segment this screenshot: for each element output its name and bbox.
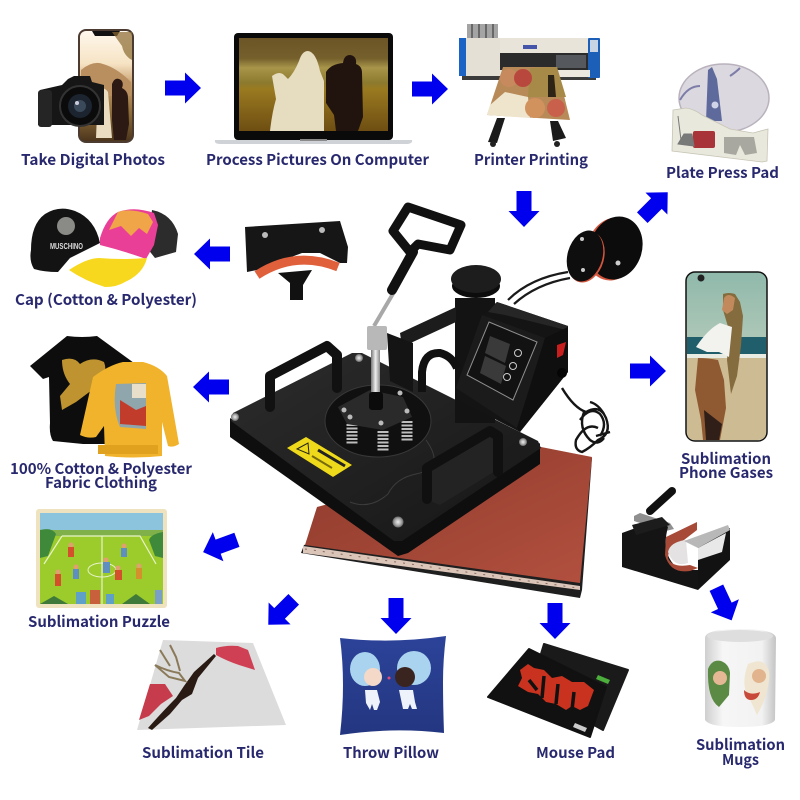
label: printer printing: Printer Printing (474, 149, 588, 170)
warning label (287, 437, 352, 477)
label: cap: Cap (Cotton & Polyester) (15, 289, 197, 310)
machine: heat press (230, 207, 610, 598)
bottom platen (301, 447, 592, 598)
label: throw pillow: Throw Pillow (343, 742, 439, 763)
label: phone cases line 1: Sublimation (681, 448, 771, 469)
heat hose (422, 353, 457, 392)
icon: pink and yellow trucker cap (69, 209, 178, 287)
icon: smartphone with photo (79, 30, 133, 142)
arrow (257, 588, 305, 636)
icon: black t-shirt (30, 336, 134, 444)
icon: pillow (340, 636, 446, 735)
label: plate press pad: Plate Press Pad (666, 162, 779, 183)
product: sublimation mugs (696, 629, 785, 770)
column and knob (400, 265, 501, 423)
arrow (412, 74, 448, 104)
label: sublimation tile: Sublimation Tile (142, 742, 264, 763)
icon: yellow sweatshirt (80, 362, 179, 458)
label: clothing line 2: Fabric Clothing (45, 472, 157, 493)
product: mouse pad (488, 644, 628, 763)
arrow (540, 603, 570, 639)
power cord (562, 388, 610, 452)
icon: printer (459, 24, 600, 147)
product: sublimation tile (137, 640, 286, 763)
label: sublimation mugs line 1: Sublimation (696, 734, 785, 755)
arrow (198, 525, 242, 567)
icon: mouse pads (488, 644, 628, 737)
left handle (270, 346, 337, 407)
bracket (387, 333, 413, 392)
step: process pictures on computer (206, 33, 429, 170)
machine: plate press attachment (508, 210, 651, 304)
product: clothing (10, 336, 192, 493)
arrow (630, 356, 666, 386)
label: sublimation mugs line 2: Mugs (722, 749, 759, 770)
product: plate press pad (666, 64, 779, 183)
icon: black cap: MUSCHINO (50, 242, 83, 251)
label: clothing line 1: 100% Cotton & Polyester (10, 458, 192, 479)
arrow (193, 372, 229, 402)
icon: plate coaster (672, 64, 769, 162)
label: phone cases line 2: Phone Gases (679, 462, 773, 483)
right handle (427, 431, 498, 505)
arrow (631, 181, 679, 229)
arrow (508, 191, 540, 227)
label: mouse pad: Mouse Pad (536, 742, 615, 763)
product: phone cases (679, 272, 773, 483)
top plate (230, 353, 541, 556)
product: throw pillow (340, 636, 446, 763)
label: take digital photos: Take Digital Photos (21, 149, 165, 170)
icon: puzzle (36, 509, 167, 608)
spring hub (338, 390, 412, 452)
control box (455, 302, 568, 432)
product: sublimation puzzle (28, 509, 170, 632)
arrow (165, 72, 201, 104)
icon: mug (705, 629, 776, 727)
icon: camera (38, 76, 104, 127)
icon: laptop (215, 33, 412, 144)
lever arm (367, 207, 461, 410)
label: sublimation puzzle: Sublimation Puzzle (28, 611, 170, 632)
arrow (194, 238, 230, 270)
icon: phone case (686, 272, 767, 441)
label: process pictures on computer: Process Pictures On Computer (206, 149, 429, 170)
product: cap (15, 209, 197, 310)
step: printer printing (459, 24, 600, 170)
step: take digital photos (21, 30, 165, 170)
arrow (702, 581, 746, 627)
machine: mug press attachment (622, 491, 730, 590)
arrow (380, 598, 412, 634)
icon: black cap (30, 209, 100, 272)
icon: tile (137, 640, 286, 730)
machine: cap press attachment (245, 221, 348, 300)
